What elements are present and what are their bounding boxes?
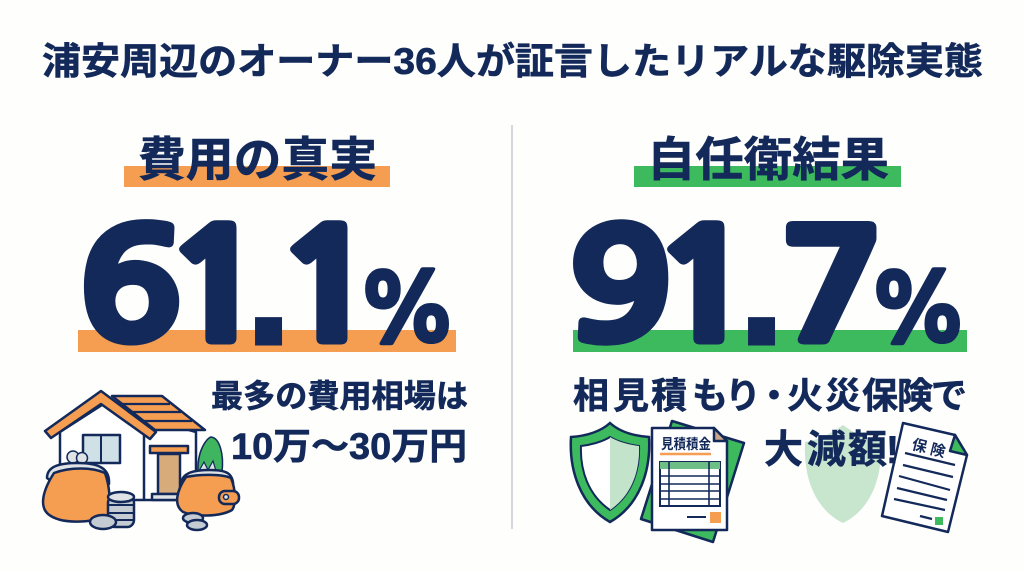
statistic: 91.7 percent: % [866,263,968,357]
statistic: 91.7 percent: 91 [567,211,759,363]
icon: insurance document: 保険 [910,436,947,461]
house [45,391,205,500]
bush [198,437,223,472]
heading: cost truth: 費用の真実 [138,133,377,186]
text: most common cost range: 10万〜30万円 [231,426,467,467]
icon: pale shield [805,425,881,523]
center divider [511,125,513,529]
right purse [177,461,239,516]
statistic: 91.7 percent: 7 [779,211,886,363]
statistic: 91.7 percent [567,191,968,381]
statistic: 61.1 percent: . [245,191,292,381]
panel: self-management results [567,133,968,542]
coins [90,492,207,530]
icon: insurance document [882,423,967,532]
left purse [43,451,110,522]
text: comparison quotes and fire insurance: 大減額! [764,429,899,472]
text: comparison quotes and fire insurance: 相見積もり・火災保険で [573,375,967,416]
text: most common cost range: 最多の費用相場は [211,378,468,414]
statistic: 61.1 percent: % [355,263,457,357]
icon: house with purses and coins [43,391,239,530]
icon: shield [571,423,649,522]
heading: DIY result: 自任衛結果 [647,133,889,186]
icon: estimate document [641,421,744,542]
text: comparison quotes and fire insurance [573,375,967,472]
statistic: 61.1 percent: 1 [275,211,382,363]
title: 浦安周辺のオーナー36人が証言したリアルな駆除実態 [42,41,983,82]
statistic: 61.1 percent [77,191,457,381]
statistic: 91.7 percent: . [738,191,785,381]
panel: cost [43,133,468,530]
statistic: 61.1 percent: 61 [77,211,271,363]
icon: estimate document: 見積積金 [661,436,711,452]
text: most common cost range [211,378,468,467]
